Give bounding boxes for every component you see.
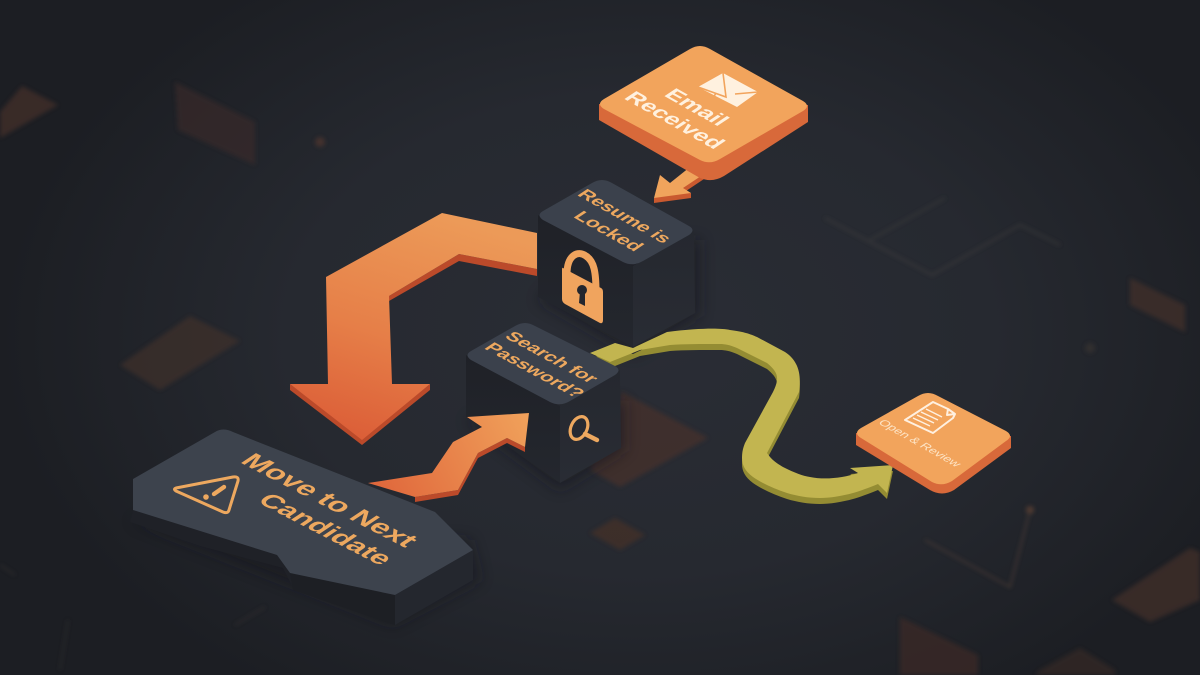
text: Search for Password?: Password? [480, 340, 590, 400]
icon: padlock [562, 254, 603, 323]
shadows under blocks [130, 240, 700, 625]
icon: magnifier [567, 414, 597, 442]
block: Search for Password? [466, 323, 621, 483]
text: Open & Review: Open & Review [875, 417, 965, 469]
text: Move to Next Candidate: Move to Next [235, 449, 425, 551]
arrow: email to resume [654, 167, 707, 203]
bent arrow: next candidate to search [368, 413, 529, 502]
text: Search for Password?: Search for [501, 328, 603, 386]
text: Email Received: Received [619, 88, 730, 152]
block: Move to Next Candidate [130, 430, 473, 625]
icon: warning triangle [174, 477, 238, 513]
text: Email Received: Email [659, 85, 734, 129]
text: Resume is Locked: Locked [569, 209, 647, 255]
icon: document [905, 402, 955, 433]
block: Open & Review [856, 393, 1011, 494]
text: Resume is Locked: Resume is [573, 186, 677, 246]
text: Move to Next Candidate: Candidate [252, 489, 400, 569]
block: Resume is Locked [538, 180, 695, 347]
block: Email Received [599, 46, 808, 180]
icon: envelope [698, 73, 758, 107]
gold curved arrow [590, 329, 893, 504]
big arrow: resume locked to next candidate [290, 213, 537, 445]
